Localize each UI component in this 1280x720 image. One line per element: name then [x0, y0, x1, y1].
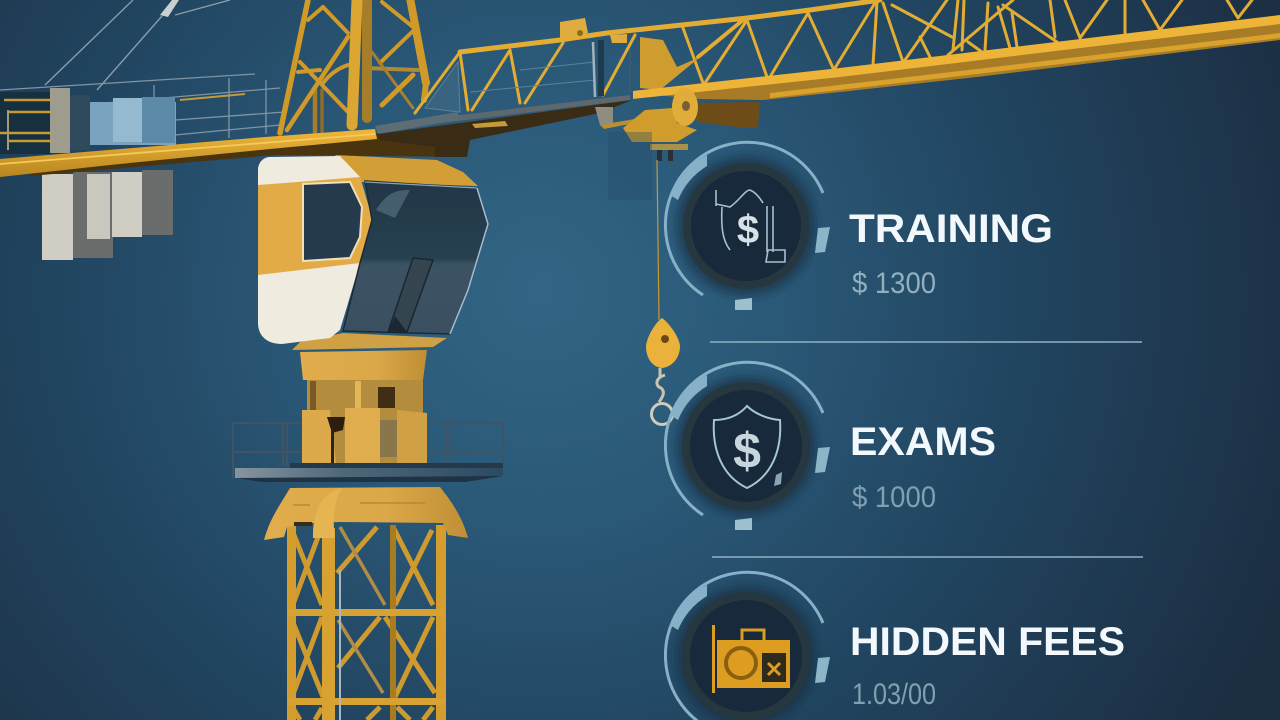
operator cab [258, 155, 488, 344]
cab side window [303, 182, 362, 261]
tower lattice [287, 525, 446, 720]
cab body [258, 156, 372, 344]
main jib boom [633, 15, 1280, 100]
cab main glazing [343, 181, 488, 334]
platform deck [235, 463, 503, 482]
yellow sheave plate [640, 37, 700, 90]
mast frame [280, 0, 426, 133]
heading: training: TRAINING [849, 207, 1053, 251]
truss glass panels [425, 40, 630, 112]
cost item: exams [665, 362, 996, 530]
heading: hidden fees: HIDDEN FEES [850, 620, 1125, 664]
divider [710, 341, 1142, 343]
main jib truss [415, 0, 1252, 113]
amount: hidden fees: 1.03/00 [852, 678, 936, 711]
cab yellow band [258, 177, 372, 275]
jib walkway deck [375, 95, 632, 157]
cab roof [335, 155, 478, 186]
icon: exams badge [665, 362, 830, 530]
trolley and winch [595, 88, 760, 200]
amount: training: $ 1300 [852, 267, 936, 300]
icon: hidden fees badge [665, 572, 830, 720]
cost item: hidden fees [665, 572, 1125, 720]
cab door bar [388, 258, 433, 332]
tower head [264, 487, 468, 540]
platform railing [233, 423, 503, 478]
heading: exams: EXAMS [850, 420, 996, 464]
cable [657, 160, 659, 320]
icon: training badge [665, 142, 830, 310]
counterweights [42, 170, 173, 260]
icon: training badge: $ [737, 208, 759, 252]
divider [712, 556, 1143, 558]
amount: exams: $ 1000 [852, 481, 936, 514]
rear jib beam [0, 129, 467, 177]
hook [646, 318, 680, 424]
stay cables [45, 0, 230, 90]
rear railing and machinery [0, 74, 285, 154]
cost item: training [665, 142, 1053, 310]
upper bracket [560, 18, 627, 43]
icon: exams badge: $ [733, 423, 761, 479]
pedestal [292, 333, 447, 463]
